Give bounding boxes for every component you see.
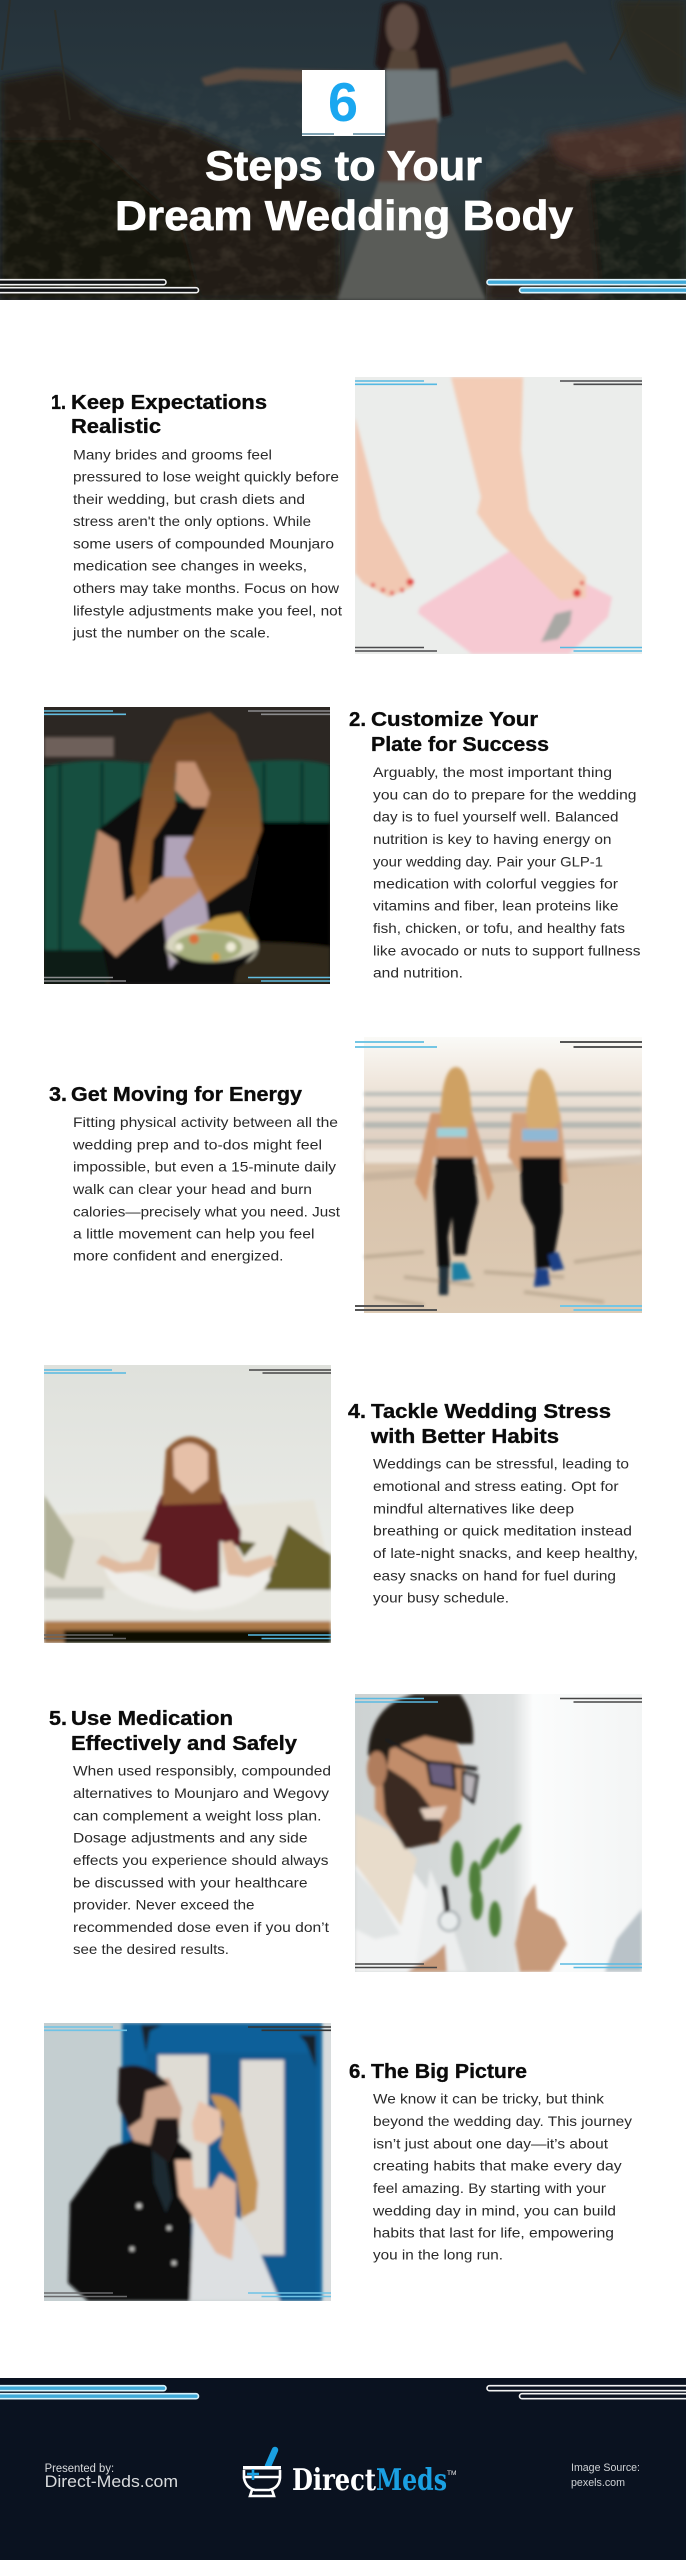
decorative bars right xyxy=(487,2386,686,2399)
heading: step 4: with Better Habits xyxy=(370,1425,559,1448)
body text: step 5: provider. Never exceed the xyxy=(73,1897,255,1913)
body text: step 4: mindful alternatives like deep xyxy=(373,1500,574,1516)
body text: step 4: your busy schedule. xyxy=(373,1590,509,1606)
corner accents xyxy=(44,1370,331,1638)
body text: step 4: emotional and stress eating. Opt for xyxy=(373,1478,619,1494)
body text: step 1: others may take months. Focus on how xyxy=(73,580,340,596)
body text: step 3: Fitting physical activity between all the xyxy=(73,1114,338,1130)
arms xyxy=(201,68,380,86)
decorative bars left xyxy=(0,280,198,293)
heading: step 1: 1. xyxy=(51,391,66,414)
body text: step 3 xyxy=(72,1114,340,1264)
body text: step 1: lifestyle adjustments make you feel, not xyxy=(73,602,342,618)
panel: step 2 xyxy=(44,707,640,984)
panel: step 1 xyxy=(51,377,642,654)
groom head xyxy=(122,2078,182,2148)
heading: step 2 xyxy=(349,708,549,756)
body text: step 5: see the desired results. xyxy=(73,1941,229,1957)
heading: step 4: 4. xyxy=(348,1400,366,1423)
body text: step 5: can complement a weight loss plan. xyxy=(73,1807,322,1823)
arms xyxy=(96,1543,160,1573)
body text: step 6: creating habits that make every day xyxy=(373,2158,622,2174)
body text: step 2: medication with colorful veggies for xyxy=(373,875,618,891)
body text: step 4: of late-night snacks, and keep healthy, xyxy=(373,1545,638,1561)
corner accents xyxy=(355,1698,642,1968)
coat xyxy=(355,1819,465,1972)
bowl xyxy=(166,924,258,970)
skirt xyxy=(337,182,486,300)
bride dress xyxy=(190,2195,280,2301)
body text: step 3: walk can clear your head and burn xyxy=(72,1181,312,1197)
header background photo: woman with outstretched arms xyxy=(0,0,686,300)
plant xyxy=(451,1821,524,1937)
beard xyxy=(381,1764,443,1849)
tie xyxy=(152,2148,172,2213)
corner accents xyxy=(355,1042,642,1310)
shirt xyxy=(162,837,209,969)
logo: DirectMeds: TM xyxy=(447,2470,456,2477)
photo: doctor with glasses in white coat xyxy=(355,1694,642,1972)
image source: pexels.com xyxy=(571,2477,625,2489)
body text: step 4: breathing or quick meditation instead xyxy=(373,1523,632,1539)
body text: step 2: fish, chicken, or tofu, and healthy fats xyxy=(373,920,625,936)
photo: bride and groom at a blue door xyxy=(44,2023,331,2301)
body text: step 4 xyxy=(373,1456,638,1606)
bride face xyxy=(192,2101,222,2145)
presented by: Direct-Meds.com xyxy=(45,2472,178,2491)
face xyxy=(173,1443,208,1493)
body text: step 6: wedding day in mind, you can build xyxy=(372,2202,616,2218)
seat xyxy=(44,1590,331,1623)
body text: step 5: alternatives to Mounjaro and Wegovy xyxy=(73,1785,329,1801)
ear xyxy=(367,1751,387,1787)
body text: step 6: habits that last for life, empowering xyxy=(373,2224,614,2240)
tank top xyxy=(385,70,440,126)
body text: step 3: a little movement can help you feel xyxy=(73,1225,314,1241)
body text: step 2: nutrition is key to having energy on xyxy=(373,831,612,847)
title xyxy=(115,142,574,239)
photo: feet stepping on pink scale xyxy=(355,377,642,654)
panel: step 5 xyxy=(49,1694,642,1972)
body text: step 1: pressured to lose weight quickly before xyxy=(73,469,339,485)
sofa back xyxy=(44,1500,331,1590)
panel: step 4 xyxy=(44,1365,638,1643)
bride hair xyxy=(210,2095,258,2218)
foliage texture xyxy=(0,104,686,300)
hair xyxy=(131,712,262,903)
body text: step 6 xyxy=(372,2091,632,2263)
vest xyxy=(94,797,259,984)
heading: step 2: Plate for Success xyxy=(371,733,549,756)
left cushion xyxy=(44,1530,159,1600)
face xyxy=(375,1723,465,1844)
heading: step 2: 2. xyxy=(349,708,366,731)
olive pillow xyxy=(264,1525,331,1591)
heading: step 1 xyxy=(51,391,267,438)
heading: step 5 xyxy=(49,1707,298,1755)
body text: step 5: When used responsibly, compounded xyxy=(73,1763,331,1779)
image source: Image Source: xyxy=(571,2462,640,2474)
presented by: Presented by: xyxy=(45,2463,114,2475)
body text: step 5: recommended dose even if you don’t xyxy=(73,1919,329,1935)
photo: two women walking on the beach xyxy=(355,1037,642,1313)
body text: step 2: like avocado or nuts to support fullness xyxy=(373,942,640,958)
left woman xyxy=(415,1113,494,1202)
body text: step 1: just the number on the scale. xyxy=(72,624,270,640)
body text: step 1: stress aren't the only options. While xyxy=(73,513,311,529)
heading: step 4: Tackle Wedding Stress xyxy=(371,1400,611,1423)
logo: DirectMeds xyxy=(243,2450,456,2498)
hair xyxy=(368,1694,473,1774)
right woman xyxy=(508,1113,568,1183)
body text: step 2: and nutrition. xyxy=(373,964,463,980)
panel: step 3 xyxy=(49,1037,642,1313)
midriff xyxy=(378,118,438,182)
body text: step 2: day is to fuel yourself well. Balanced xyxy=(373,809,618,825)
body text: step 3: impossible, but even a 15-minute daily xyxy=(73,1159,336,1175)
body text: step 1: their wedding, but crash diets and xyxy=(73,491,305,507)
body text: step 6: isn’t just about one day—it’s about xyxy=(373,2135,608,2151)
title: Dream Wedding Body xyxy=(115,192,574,239)
body text: step 5 xyxy=(73,1763,331,1957)
icon: mortar and pestle xyxy=(243,2450,281,2496)
heading: step 3: Get Moving for Energy xyxy=(71,1083,303,1106)
legs xyxy=(104,1564,270,1610)
body text: step 5: effects you experience should always xyxy=(73,1852,328,1868)
stethoscope xyxy=(439,1911,459,1931)
panel: step 6 xyxy=(44,2023,632,2301)
body text: step 5: Dosage adjustments and any side xyxy=(73,1830,308,1846)
body text: step 6: feel amazing. By starting with your xyxy=(373,2180,606,2196)
body text: step 2: vitamins and fiber, lean proteins like xyxy=(373,898,619,914)
body text: step 3: more confident and energized. xyxy=(73,1248,284,1264)
body text: step 1: some users of compounded Mounjaro xyxy=(73,535,334,551)
body text: step 6: We know it can be tricky, but think xyxy=(373,2091,605,2107)
heading: step 5: 5. xyxy=(49,1707,67,1730)
body text: step 1: Many brides and grooms feel xyxy=(73,446,272,462)
body text: step 2: your wedding day. Pair your GLP-1 xyxy=(373,853,603,869)
number badge xyxy=(302,70,385,136)
hair xyxy=(375,1,452,120)
laptop xyxy=(605,1909,642,1972)
heading: step 1: Realistic xyxy=(71,415,161,438)
body text: step 6: you in the long run. xyxy=(373,2247,503,2263)
body text: step 2 xyxy=(373,764,640,980)
number badge: 6 xyxy=(328,72,358,133)
corner accents xyxy=(44,711,330,981)
image source xyxy=(571,2462,640,2489)
groom body xyxy=(68,2128,192,2301)
decorative bars left xyxy=(0,2386,198,2399)
body text: step 1: medication see changes in weeks, xyxy=(73,558,307,574)
toast xyxy=(194,913,258,941)
heading: step 5: Effectively and Safely xyxy=(71,1732,298,1755)
hand xyxy=(515,1884,567,1972)
body text: step 2: you can do to prepare for the wedding xyxy=(373,786,636,802)
panel: footer xyxy=(0,2378,686,2560)
bride arm and chest xyxy=(175,2160,236,2260)
hair xyxy=(162,1436,222,1505)
logo: DirectMeds: Meds xyxy=(376,2463,447,2498)
heading: step 3: 3. xyxy=(49,1083,67,1106)
presented by xyxy=(45,2463,178,2491)
photo: woman eating salad in green booth xyxy=(44,707,330,984)
plant xyxy=(44,1495,74,1580)
glasses xyxy=(385,1739,477,1769)
heading: step 5: Use Medication xyxy=(71,1707,233,1730)
heading: step 6: The Big Picture xyxy=(371,2060,527,2083)
heading: step 1: Keep Expectations xyxy=(71,391,267,414)
arm xyxy=(81,830,199,957)
body text: step 4: Weddings can be stressful, leading to xyxy=(373,1456,629,1472)
body text: step 3: calories—precisely what you need. Just xyxy=(73,1203,340,1219)
face xyxy=(386,4,418,52)
body text: step 6: beyond the wedding day. This journey xyxy=(373,2113,632,2129)
photo: woman meditating on sofa xyxy=(44,1365,331,1643)
body text: step 2: Arguably, the most important thing xyxy=(373,764,612,780)
corner accents xyxy=(355,381,642,651)
body text: step 1 xyxy=(72,446,342,640)
body text: step 3: wedding prep and to-dos might feel xyxy=(72,1136,322,1152)
wordmark: Direct xyxy=(292,2463,376,2498)
body text: step 4: easy snacks on hand for fuel during xyxy=(373,1567,616,1583)
face xyxy=(175,762,210,807)
panel: header banner xyxy=(0,0,686,300)
corner accents xyxy=(44,2027,331,2296)
shirt xyxy=(142,1493,241,1593)
heading: step 2: Customize Your xyxy=(371,708,538,731)
heading: step 4 xyxy=(348,1400,611,1448)
body text: step 5: be discussed with your healthcare xyxy=(73,1874,308,1890)
decorative bars right xyxy=(487,280,686,293)
heading: step 6: 6. xyxy=(349,2060,366,2083)
title: Steps to Your xyxy=(205,142,482,189)
